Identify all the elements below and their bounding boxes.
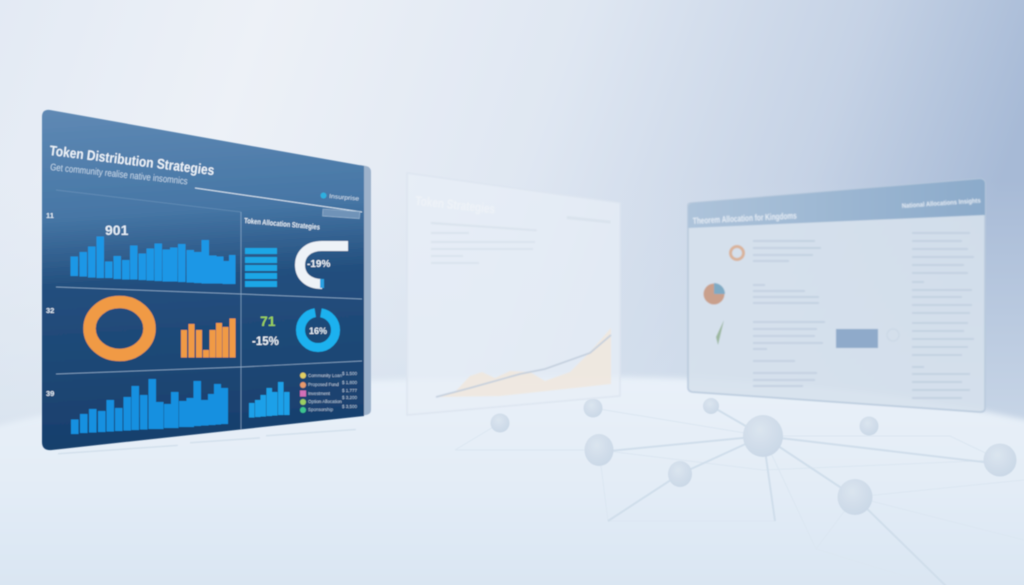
nodes bbox=[490, 398, 1016, 515]
metric: 71: 71 bbox=[260, 313, 276, 329]
row labels: 39 bbox=[46, 389, 54, 398]
blue donut chart bbox=[300, 312, 336, 348]
dividers bbox=[56, 188, 362, 429]
row labels bbox=[46, 211, 54, 398]
legend list: $ 1,777 bbox=[342, 388, 358, 393]
legend list: $ 3,500 bbox=[342, 404, 358, 409]
text block: dashboard subtitle: Get community realise native insomnics bbox=[50, 162, 188, 187]
legend list: Community Loan bbox=[308, 373, 343, 378]
donut value: 16% bbox=[309, 326, 327, 336]
heading: right slide title: Theorem Allocation for Kingdoms bbox=[693, 211, 797, 226]
text block: right slide rows bbox=[753, 232, 974, 399]
legend list: Option Allocation bbox=[308, 399, 342, 404]
icons: right slide bbox=[704, 246, 899, 348]
orange bar chart bbox=[181, 318, 236, 358]
panel: main dashboard slide bbox=[42, 110, 371, 450]
text block: middle slide bullets bbox=[431, 216, 611, 264]
legend badge: Insurprise bbox=[329, 194, 360, 203]
number: 901: 901 bbox=[105, 222, 129, 238]
bar chart: top left bbox=[70, 236, 236, 284]
legend list: $ 1,800 bbox=[342, 380, 358, 385]
panel: faded right slide bbox=[688, 179, 985, 412]
text block: faint caption below dashboard bbox=[58, 429, 356, 454]
gauge value: -19% bbox=[307, 259, 330, 270]
metric: -15%: -15% bbox=[252, 336, 279, 348]
legend list: $ 3,200 bbox=[342, 395, 358, 400]
area and line chart bbox=[436, 328, 611, 397]
orange donut chart bbox=[90, 302, 150, 355]
header band bbox=[688, 179, 985, 228]
legend list bbox=[300, 371, 358, 413]
legend badge bbox=[320, 192, 360, 219]
network graph bbox=[455, 398, 1024, 585]
legend list: Proposed Fund bbox=[308, 382, 339, 387]
legend list: Sponsorship bbox=[308, 407, 334, 412]
curved floor bbox=[0, 377, 1024, 585]
bar chart: bottom left bbox=[71, 379, 228, 434]
legend list: Investment bbox=[308, 391, 331, 396]
row labels: 11 bbox=[46, 211, 54, 220]
heading: right slide subtitle: National Allocations Insights bbox=[902, 197, 981, 210]
heading: middle slide title: Token Strategies bbox=[415, 193, 496, 216]
row labels: 32 bbox=[46, 306, 54, 315]
white gauge bbox=[300, 246, 348, 288]
glass edge bbox=[360, 165, 371, 416]
list bars bbox=[245, 248, 277, 287]
panel: faded middle slide bbox=[407, 173, 620, 415]
legend list: $ 1,500 bbox=[342, 371, 358, 376]
heading: allocation subtitle: Token Allocation Strategies bbox=[244, 216, 320, 232]
bar chart: bottom right bbox=[249, 382, 290, 418]
heading: dashboard title: Token Distribution Strategies bbox=[49, 142, 216, 178]
